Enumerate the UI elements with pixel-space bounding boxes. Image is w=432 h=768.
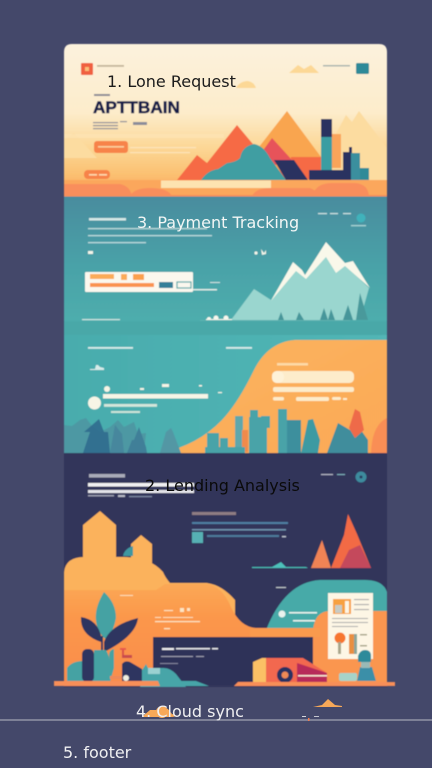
panel: lending analysis: [64, 455, 387, 687]
infographic card: [54, 44, 395, 687]
red van: [253, 658, 327, 683]
figure with red flag: [110, 648, 142, 682]
red tree: [349, 409, 364, 438]
teal hill: [266, 580, 387, 630]
cream platform: [161, 180, 271, 188]
button: orange pill: [94, 141, 128, 153]
red block: [291, 157, 321, 179]
label: 3. Payment Tracking: 3. Payment Tracking: [137, 213, 299, 232]
label: 1. Lone Request: 1. Lone Request: [107, 72, 236, 91]
left labels: [88, 347, 252, 370]
ground: [64, 179, 388, 187]
top right label and icon: [318, 213, 366, 226]
text lines: [88, 218, 212, 254]
trees: [278, 293, 368, 320]
pale van window: [148, 668, 160, 674]
orange castle: [64, 511, 235, 640]
mountain: orange back peak: [259, 111, 321, 180]
button: small pill: [84, 170, 110, 179]
mini eyebrow text: [94, 94, 110, 96]
base shelf: [54, 681, 395, 686]
panel: payment tracking: [64, 195, 387, 335]
panel: loan request: [64, 44, 387, 196]
plant: [81, 592, 138, 652]
mountain: teal mound: [201, 144, 286, 180]
navy slope: [274, 160, 308, 180]
white marks on teal hill: [276, 587, 317, 622]
icon: red logo square: [81, 63, 93, 75]
orange foreground hill: [371, 418, 387, 455]
small teal window: [123, 546, 133, 556]
top right label and icon: [321, 472, 366, 482]
right label: [277, 363, 308, 366]
orange joint: [250, 628, 320, 637]
orange right block: [313, 611, 387, 685]
faint lines: [130, 147, 196, 153]
mountains: red triangles: [311, 514, 371, 568]
dark panel text: [160, 648, 218, 664]
mountain: pale teal range: [231, 256, 369, 320]
foreground hills: [64, 183, 369, 196]
white data bar: [85, 272, 220, 292]
planter: [67, 649, 114, 682]
orange landscape: [64, 584, 290, 682]
small header text: [97, 65, 124, 67]
dark inner band: [153, 637, 312, 685]
white sparkle text: [120, 595, 200, 629]
mountain: red peak: [177, 125, 290, 180]
label: 5. footer: 5. footer: [63, 743, 132, 762]
top right icon and label: [323, 63, 369, 74]
shrubs: [206, 316, 232, 321]
teal water line: [252, 562, 308, 568]
ground band: [64, 321, 387, 335]
pale side mountains: [64, 111, 387, 185]
mountain: snow cap: [271, 242, 370, 301]
label: 4. Cloud sync: 4. Cloud sync: [136, 702, 244, 721]
heading: APTTBAIN: [93, 99, 180, 117]
birds: [254, 249, 266, 255]
report document: [328, 593, 373, 659]
small marker: [302, 716, 319, 721]
bottom edge: [64, 453, 387, 455]
teal vehicle: [140, 664, 186, 687]
left forest: [64, 418, 181, 453]
left bars: [88, 384, 222, 413]
base line: [82, 319, 350, 321]
label: 2. Lending Analysis: 2. Lending Analysis: [145, 476, 300, 495]
top edge highlight: [64, 195, 387, 196]
sub heading text: [93, 121, 147, 129]
heading lines: [88, 474, 194, 497]
bottom clouds: [143, 699, 342, 718]
mountain: crimson peak: [262, 138, 292, 165]
orange wave: [161, 340, 387, 455]
horizontal rule: [0, 720, 432, 721]
center text block: [192, 512, 288, 543]
right city: [205, 409, 368, 455]
right bars: [272, 371, 354, 401]
panel: teal and orange: [64, 335, 387, 455]
pale horizon band: [64, 134, 224, 138]
city buildings: [309, 119, 369, 180]
decorative clouds: [236, 65, 319, 88]
person: [339, 650, 376, 681]
